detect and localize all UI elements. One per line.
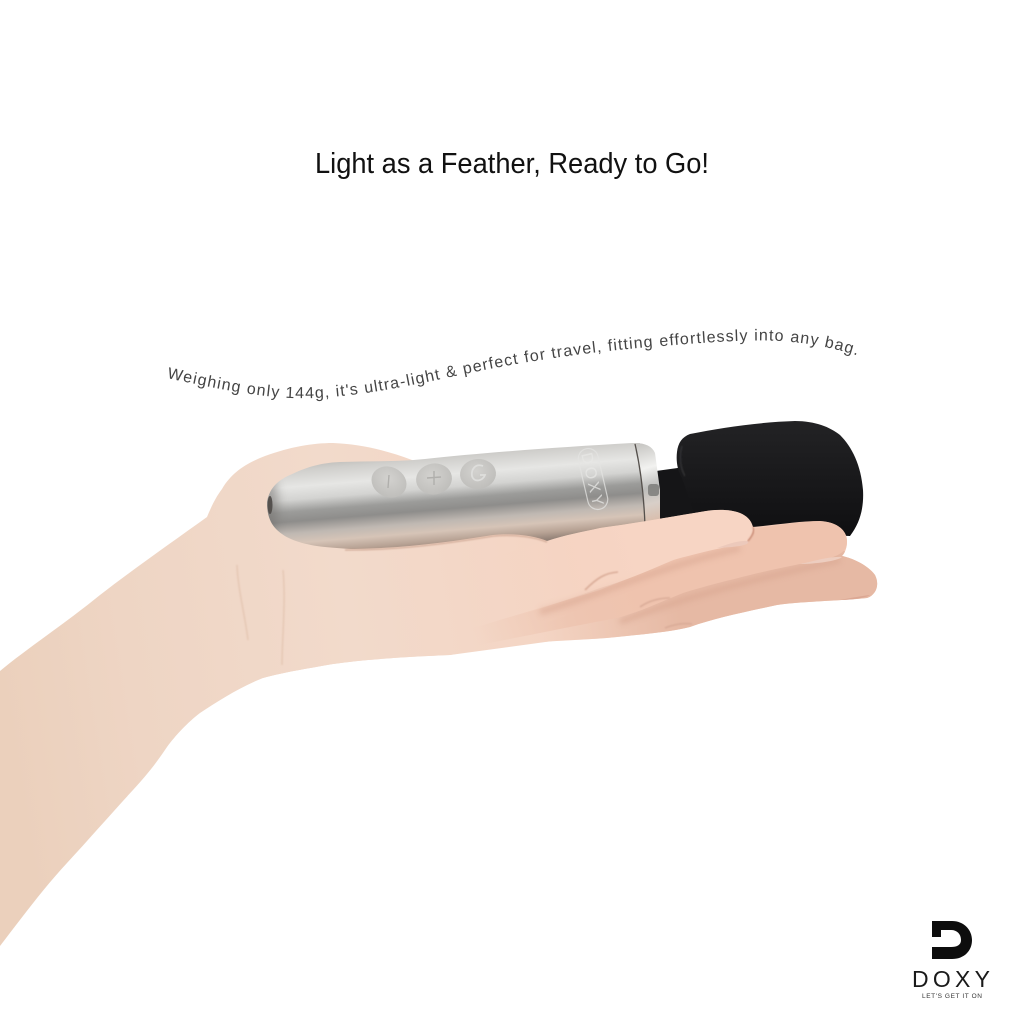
metal body bbox=[267, 443, 648, 550]
knuckle creases bbox=[585, 572, 692, 628]
shadow under body on palm bbox=[345, 535, 547, 550]
brand logo bbox=[912, 921, 990, 1000]
wrist crease bbox=[237, 565, 284, 665]
index finger bbox=[596, 510, 753, 590]
logo mark bbox=[932, 921, 972, 959]
finger shading, clipped to hand bbox=[516, 510, 878, 640]
palm and fingers bbox=[200, 510, 880, 678]
fingernail: ring bbox=[840, 595, 870, 600]
tagline: LET'S GET IT ON bbox=[922, 993, 982, 1000]
middle finger bbox=[516, 521, 847, 636]
fingernail: middle bbox=[800, 557, 842, 564]
neck bbox=[656, 466, 696, 524]
charging port bbox=[268, 496, 272, 514]
head rim highlight bbox=[680, 446, 685, 476]
curved caption: Weighing only 144g, it's ultra-light & perfect for travel, fitting effortlessly into any bag. bbox=[169, 328, 856, 402]
device bbox=[254, 421, 863, 550]
shadow under index finger bbox=[540, 548, 740, 612]
shadow between index finger and head bbox=[748, 527, 754, 541]
forearm and back of hand bbox=[0, 443, 560, 946]
wordmark: DOXY bbox=[912, 966, 990, 992]
collar gloss bbox=[648, 484, 659, 496]
fingernail: index bbox=[717, 541, 748, 548]
button: power bbox=[459, 457, 497, 491]
title: Light as a Feather, Ready to Go! bbox=[315, 148, 709, 180]
silicone head bbox=[677, 421, 863, 536]
ring finger bbox=[576, 551, 878, 640]
collar ring bbox=[634, 443, 660, 527]
palm and finger silhouette bbox=[200, 510, 877, 678]
engraved logo: DOXY bbox=[577, 451, 606, 508]
button: minus bbox=[366, 461, 412, 503]
button: plus bbox=[414, 461, 454, 497]
shadow under middle finger bbox=[620, 560, 840, 622]
tip shade bbox=[267, 482, 284, 530]
collar groove bbox=[635, 444, 645, 526]
